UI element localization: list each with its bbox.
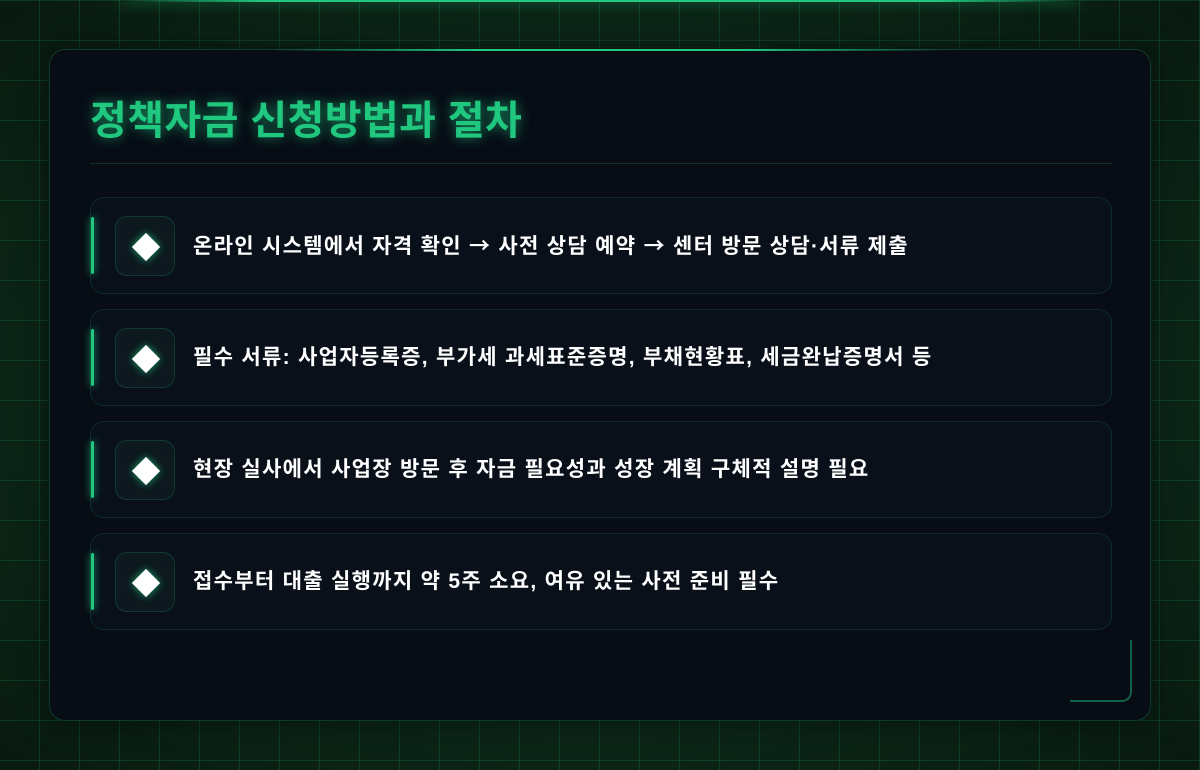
item 3 <box>90 421 1112 518</box>
item 2 <box>90 309 1112 406</box>
icon: diamond <box>115 552 175 612</box>
text 4: 접수부터 대출 실행까지 약 5주 소요, 여유 있는 사전 준비 필수 <box>193 570 779 593</box>
icon: diamond <box>115 216 175 276</box>
text 1: 온라인 시스템에서 자격 확인 → 사전 상담 예약 → 센터 방문 상담·서류 제출 <box>193 230 909 260</box>
item 4 <box>90 533 1112 630</box>
corner bracket <box>1070 640 1132 702</box>
text 2: 필수 서류: 사업자등록증, 부가세 과세표준증명, 부채현황표, 세금완납증명서 등 <box>193 346 932 369</box>
item 1 <box>90 197 1112 294</box>
icon: diamond <box>115 328 175 388</box>
text 3: 현장 실사에서 사업장 방문 후 자금 필요성과 성장 계획 구체적 설명 필요 <box>193 458 869 481</box>
title: 정책자금 신청방법과 절차 <box>90 99 522 143</box>
icon: diamond <box>115 440 175 500</box>
